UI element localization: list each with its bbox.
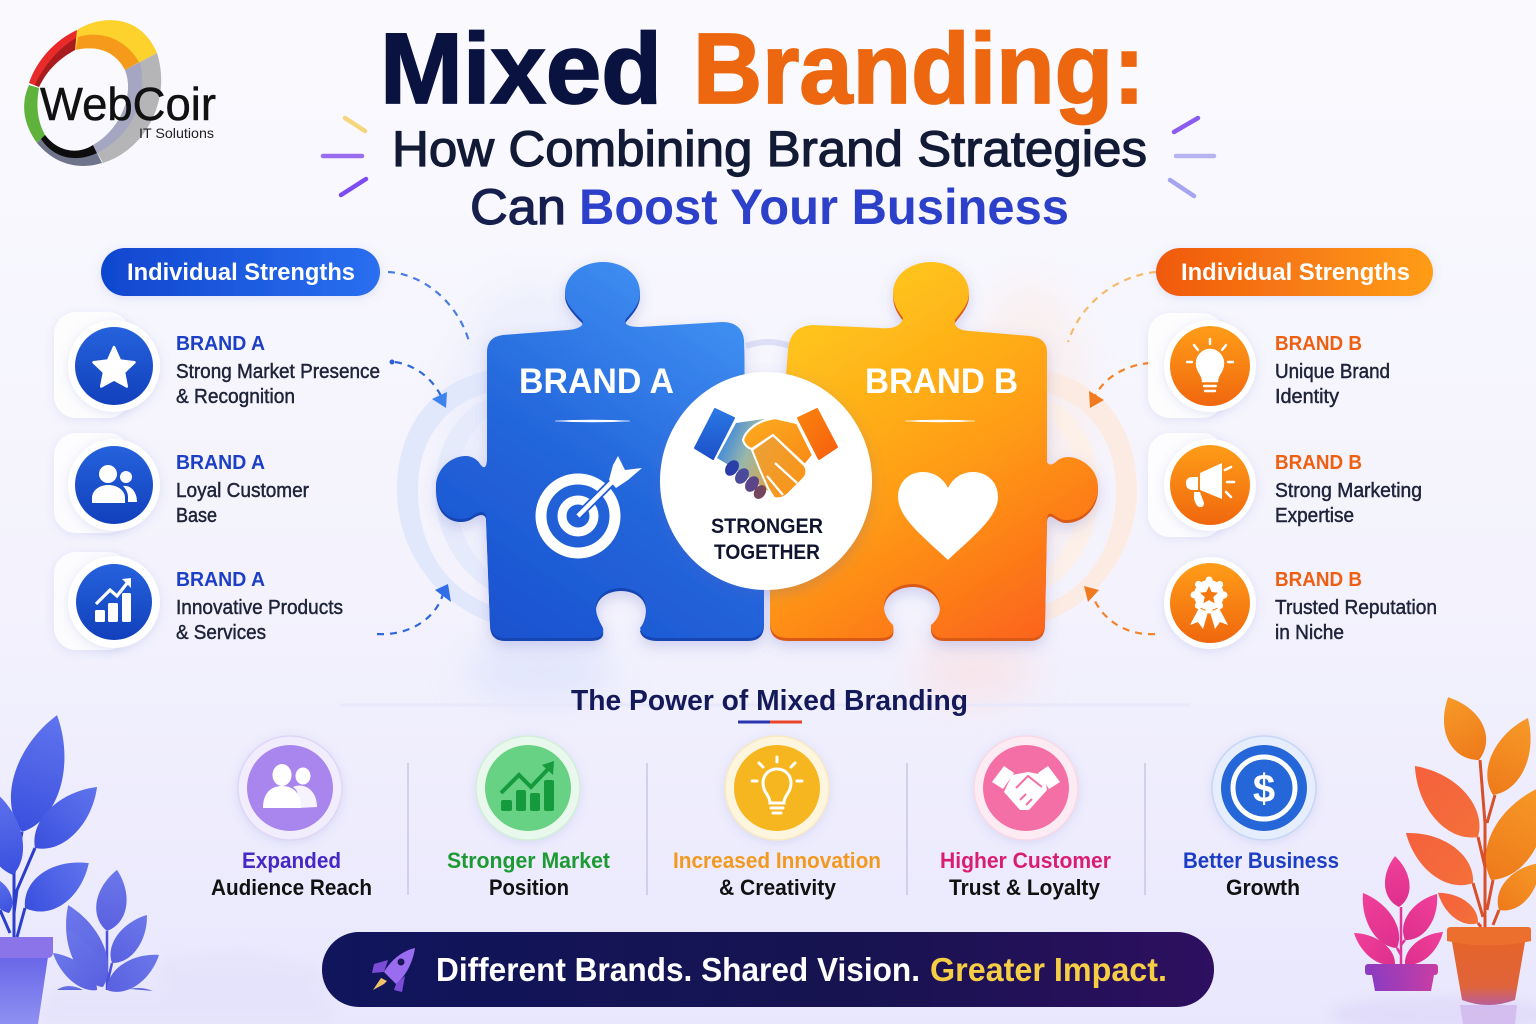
pot xyxy=(1447,927,1531,1024)
benefit: better business growth: Better Business xyxy=(1183,848,1339,873)
benefit: stronger market position xyxy=(447,736,611,900)
brand A item 1: & Recognition xyxy=(176,386,295,408)
plant: small blue left xyxy=(47,867,166,1001)
brand B item 1 xyxy=(1148,313,1390,418)
benefit: better business growth xyxy=(1183,736,1339,900)
logo wordmark: WebCoir xyxy=(40,78,216,130)
badge text: STRONGER xyxy=(711,515,823,538)
panel: brand B strengths xyxy=(1148,313,1437,649)
benefit: expanded audience reach xyxy=(211,736,372,900)
sparkle lines left xyxy=(323,118,366,195)
brand B item 2: Strong Marketing xyxy=(1275,480,1422,502)
brand A item 3: & Services xyxy=(176,622,266,644)
brand B item 1: Unique Brand xyxy=(1275,361,1390,383)
brand A item 3 xyxy=(54,552,343,650)
heading: the power of mixed branding: The Power of Mixed Branding xyxy=(571,685,968,717)
badge text: TOGETHER xyxy=(714,541,820,564)
brand B item 1: Identity xyxy=(1275,386,1339,408)
title xyxy=(380,13,1147,235)
pot xyxy=(0,937,53,1024)
plant: large orange right xyxy=(1395,689,1536,1024)
banner text: Greater Impact. xyxy=(930,951,1167,988)
benefit: higher customer trust and loyalty: Higher Customer xyxy=(940,848,1111,873)
title line 1: Mixed xyxy=(380,13,662,125)
puzzle piece: brand A xyxy=(436,262,764,641)
dashed arrows left xyxy=(377,272,470,634)
benefit: higher customer trust and loyalty xyxy=(940,736,1111,900)
brand A item 2 xyxy=(54,433,309,533)
benefit: expanded audience reach: Audience Reach xyxy=(211,875,372,900)
brand B item 2: Expertise xyxy=(1275,505,1354,527)
brand B item 2 xyxy=(1148,433,1422,537)
brand B item 3 xyxy=(1164,557,1437,649)
brand A item 1 xyxy=(54,312,380,418)
brand B item 1: BRAND B xyxy=(1275,333,1362,355)
brand A item 2: Base xyxy=(176,505,217,527)
subtitle line 1: How Combining Brand Strategies xyxy=(392,121,1147,177)
banner: tagline xyxy=(322,932,1214,1007)
logo: WebCoir IT Solutions xyxy=(24,20,216,166)
panel: brand A strengths xyxy=(54,312,380,650)
title line 1: Branding: xyxy=(693,13,1145,125)
benefit: increased innovation and creativity: Increased Innovation xyxy=(673,848,881,873)
brand B item 3: in Niche xyxy=(1275,622,1344,644)
brand B item 2: BRAND B xyxy=(1275,452,1362,474)
subtitle line 2: Boost Your Business xyxy=(579,179,1069,235)
brand A item 3: BRAND A xyxy=(176,569,265,591)
icon: handshake xyxy=(695,409,837,501)
benefit: increased innovation and creativity: & Creativity xyxy=(719,875,837,900)
dashed arrows right xyxy=(1068,272,1156,634)
icon: rocket xyxy=(372,948,415,992)
sparkle lines right xyxy=(1170,118,1214,196)
benefit: stronger market position: Stronger Market xyxy=(447,848,611,873)
pot xyxy=(1365,964,1438,991)
brand A item 1: Strong Market Presence xyxy=(176,361,380,383)
logo tagline: IT Solutions xyxy=(139,125,214,141)
benefit: expanded audience reach: Expanded xyxy=(242,848,341,873)
pill: individual strengths right xyxy=(1156,248,1433,296)
centre badge: stronger together xyxy=(660,372,872,590)
icon: target with arrow xyxy=(541,456,642,553)
benefit: better business growth: Growth xyxy=(1226,875,1300,900)
plant: small pink right xyxy=(1348,855,1449,991)
benefit: better business growth: $ xyxy=(1253,767,1275,811)
pill: individual strengths left: Individual Strengths xyxy=(127,259,355,286)
brand B item 3: Trusted Reputation xyxy=(1275,597,1437,619)
brand B label: BRAND B xyxy=(865,362,1018,401)
benefit: increased innovation and creativity xyxy=(673,736,881,900)
brand B item 3: BRAND B xyxy=(1275,569,1362,591)
icon: heart xyxy=(898,472,998,560)
brand A item 2: Loyal Customer xyxy=(176,480,309,502)
brand A item 1: BRAND A xyxy=(176,333,265,355)
banner text: Different Brands. Shared Vision. xyxy=(436,951,920,988)
plant: large blue left xyxy=(0,708,109,1024)
logo ring xyxy=(24,20,161,166)
pill: individual strengths right: Individual Strengths xyxy=(1181,259,1410,286)
benefit: higher customer trust and loyalty: Trust & Loyalty xyxy=(949,875,1101,900)
benefit: stronger market position: Position xyxy=(489,875,569,900)
subtitle line 2: Can xyxy=(470,179,566,235)
brand A label: BRAND A xyxy=(519,362,674,401)
brand A item 2: BRAND A xyxy=(176,452,265,474)
brand A item 3: Innovative Products xyxy=(176,597,343,619)
pill: individual strengths left xyxy=(101,248,380,296)
puzzle piece: brand B xyxy=(770,262,1098,641)
benefit dividers xyxy=(408,763,1145,895)
